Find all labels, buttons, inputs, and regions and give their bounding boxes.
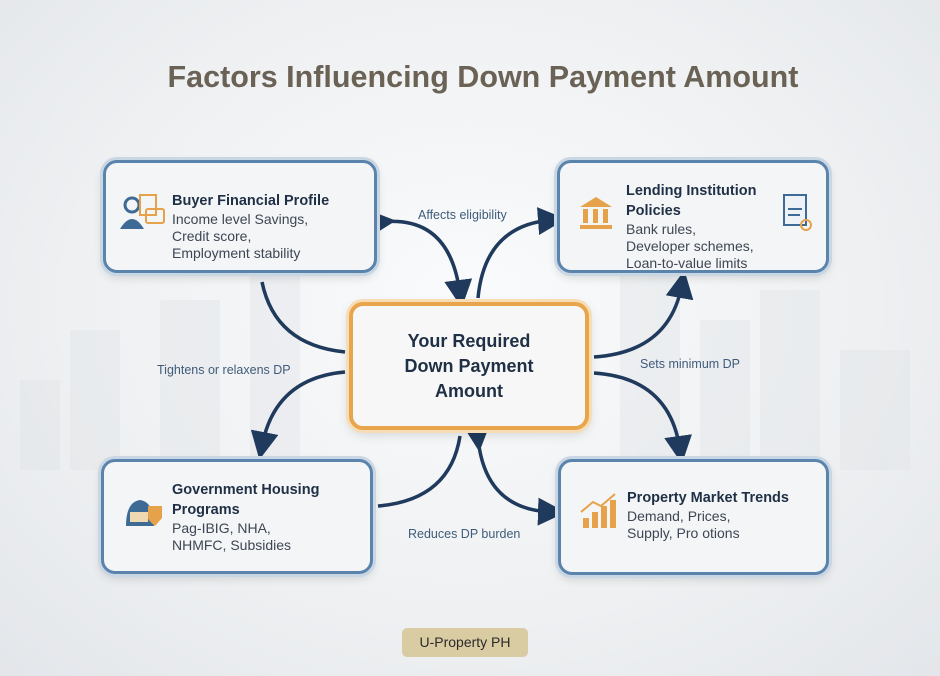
panel: buyer: Buyer Financial Profile: [172, 193, 329, 209]
icon: person: [120, 194, 165, 229]
panel: buyer: Income level Savings,: [172, 211, 308, 227]
label: affects eligibility: Affects eligibility: [418, 208, 507, 222]
footer badge: [402, 628, 528, 657]
center box: [349, 302, 589, 430]
panel: government: Programs: [172, 502, 240, 518]
label: sets minimum: Sets minimum DP: [640, 357, 740, 371]
center box: Down Payment: [404, 356, 534, 376]
panel: buyer: Employment stability: [172, 245, 300, 261]
panel: lending: Developer schemes,: [626, 238, 754, 254]
panel: lending: [557, 160, 829, 273]
panel: lending: Policies: [626, 203, 681, 219]
panel: lending: Loan-to-value limits: [626, 255, 747, 271]
label: tightens: Tightens or relaxens DP: [157, 363, 291, 377]
panel: market: Demand, Prices,: [627, 508, 730, 524]
panel: market: [558, 459, 829, 575]
center box: Your Required: [408, 330, 530, 350]
panel: government: NHMFC, Subsidies: [172, 537, 291, 553]
panel: government: [101, 459, 373, 574]
label: reduces: Reduces DP burden: [408, 527, 520, 541]
panel: government: Pag-IBIG, NHA,: [172, 520, 271, 536]
panel: market: Property Market Trends: [627, 490, 789, 506]
icon: document: [783, 194, 812, 231]
panel: lending: Lending Institution: [626, 183, 756, 199]
center box: Amount: [435, 380, 503, 400]
title: Factors Influencing Down Payment Amount: [168, 60, 798, 94]
footer badge: U-Property PH: [419, 634, 511, 650]
panel: buyer: [103, 160, 377, 273]
panel: lending: Bank rules,: [626, 221, 696, 237]
panel: government: Government Housing: [172, 482, 319, 498]
icon: building shield: [126, 500, 162, 526]
icon: bank: [580, 197, 612, 229]
panel: buyer: Credit score,: [172, 228, 251, 244]
icon: chart: [580, 493, 616, 528]
panel: market: Supply, Pro otions: [627, 525, 740, 541]
